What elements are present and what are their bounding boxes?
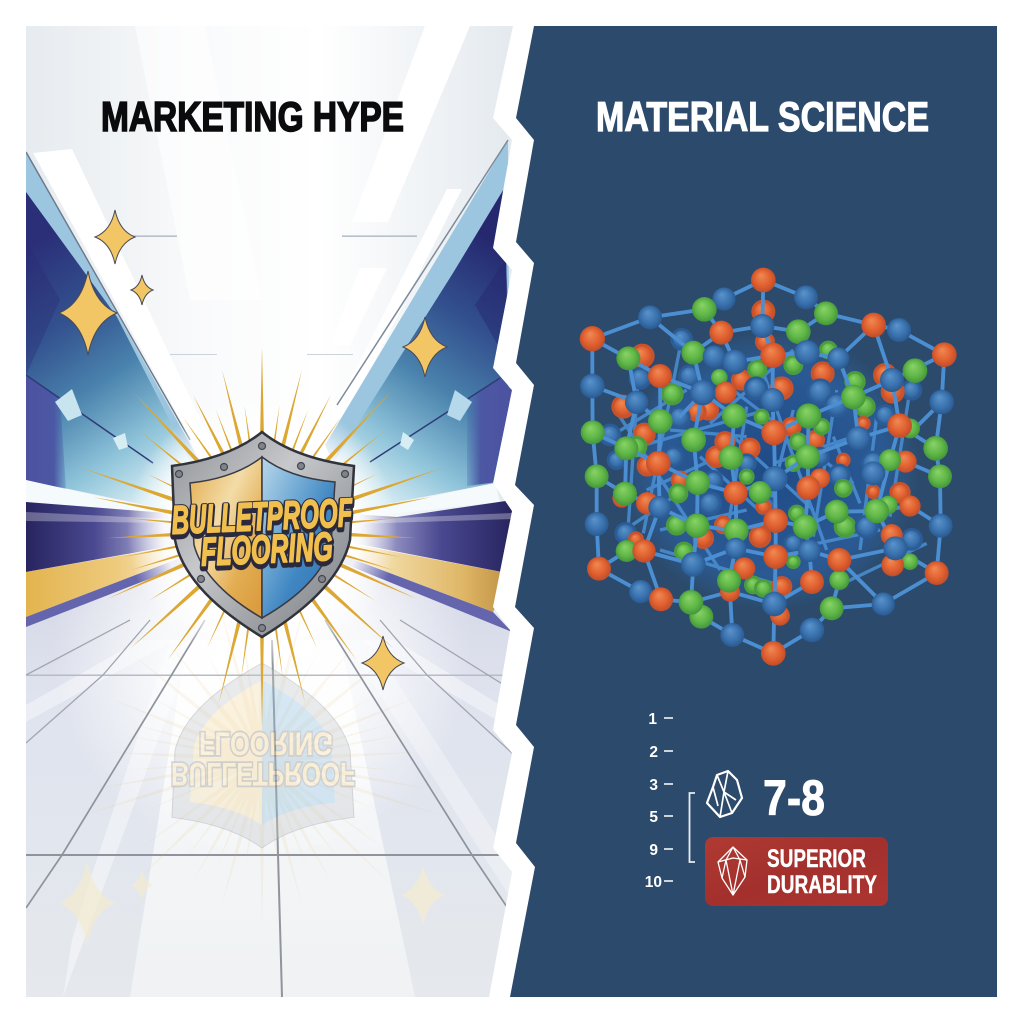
callout: superior durability: DURABLITY (767, 871, 877, 899)
reflection of shield: FLOORING (199, 725, 333, 761)
icon: gem (718, 847, 747, 895)
sparkles (59, 210, 447, 690)
icon: rock (707, 771, 742, 817)
hardness value: 7-8 (763, 770, 825, 826)
left wall (26, 152, 205, 510)
hardness scale: 2 (649, 744, 658, 761)
central glow (130, 424, 394, 662)
hardness scale: 9 (649, 842, 658, 859)
shield text fill: FLOORING (200, 525, 334, 575)
heading: marketing hype: MARKETING HYPE (101, 93, 404, 140)
shield text outline (170, 496, 355, 572)
corridor bands (26, 480, 512, 632)
crystal lattice molecule (580, 268, 957, 666)
hardness scale (645, 711, 673, 891)
callout: superior durability: SUPERIOR (767, 845, 866, 873)
bracket (690, 793, 695, 862)
shield text fill (172, 498, 353, 566)
faint floor sparkles (59, 861, 445, 945)
hardness scale: 3 (649, 777, 658, 794)
golden rays (79, 347, 445, 727)
shield text outline: FLOORING (200, 527, 334, 577)
panel: material science (510, 26, 997, 997)
right wall (325, 140, 512, 510)
back atoms (600, 301, 922, 596)
hardness scale: 1 (648, 711, 657, 728)
hardness scale: 5 (649, 809, 658, 826)
ceiling light strips (33, 26, 470, 455)
reflection of shield: BULLETPROOF (171, 756, 355, 792)
shield text fill: BULLETPROOF (171, 491, 354, 543)
floor (26, 560, 516, 997)
reflection of shield (89, 610, 436, 914)
callout: superior durability (705, 837, 888, 906)
shield text outline: BULLETPROOF (171, 493, 354, 545)
front atoms (580, 268, 957, 666)
shield badge (171, 432, 356, 637)
panel: marketing hype (26, 26, 516, 997)
heading: material science: MATERIAL SCIENCE (596, 93, 929, 140)
hardness scale: 10 (645, 874, 662, 891)
